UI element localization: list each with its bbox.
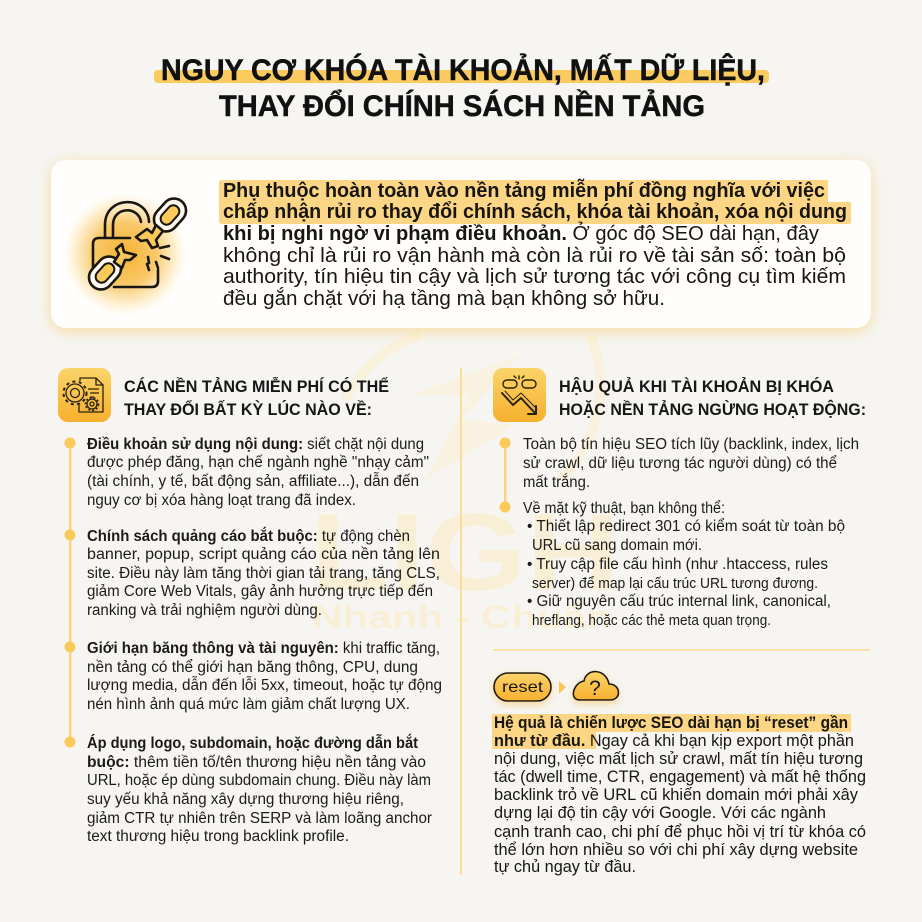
right timeline <box>500 438 510 512</box>
item: terms of use: nguy cơ bị xóa hàng loạt trang đã index. <box>87 492 356 509</box>
lower chain link <box>84 252 126 294</box>
item: logo and subdomain: giảm CTR tự nhiên trên SERP và làm loãng anchor <box>87 810 432 827</box>
reset paragraph: dựng lại độ tin cậy với Google. Với các ngành <box>494 803 826 822</box>
item: logo and subdomain: text thương hiệu trong backlink profile. <box>87 828 349 845</box>
card text <box>223 178 847 310</box>
card text: Phụ thuộc hoàn toàn vào nền tảng miễn phí đồng nghĩa với việc <box>223 178 825 202</box>
item: technical limits: Về mặt kỹ thuật, bạn không thể: <box>523 500 725 517</box>
timeline <box>64 438 76 748</box>
title <box>154 53 769 123</box>
item: logo and subdomain: Áp dụng logo, subdomain, hoặc đường dẫn bắt <box>87 734 418 752</box>
reset paragraph: backlink trỏ về URL cũ khiến domain mới phải xây <box>494 785 858 804</box>
item: bandwidth limits: Giới hạn băng thông và tài nguyên: khi traffic tăng, <box>87 640 440 657</box>
item: bandwidth limits: lượng media, dẫn đến lỗi 5xx, timeout, hoặc tự động <box>87 677 442 694</box>
card text: authority, tín hiệu tin cậy và lịch sử tương tác với công cụ tìm kiếm <box>223 265 846 288</box>
reset paragraph: như từ đầu. Ngay cả khi bạn kịp export một phần <box>494 731 854 750</box>
reset paragraph: cạnh tranh cao, chi phí để phục hồi vị trí từ khóa có <box>494 822 866 841</box>
item: lost signals: Toàn bộ tín hiệu SEO tích lũy (backlink, index, lịch <box>523 436 859 453</box>
item: bandwidth limits: nén hình ảnh quá mức làm giảm chất lượng UX. <box>87 696 410 713</box>
item: technical limits <box>523 500 845 629</box>
question cloud: ? <box>589 677 601 700</box>
item: lost signals: sử crawl, dữ liệu tương tác người dùng) có thể <box>523 455 837 472</box>
item: logo and subdomain: suy yếu khả năng xây dựng thương hiệu riêng, <box>87 791 404 808</box>
card highlight <box>219 180 851 224</box>
right heading: HẬU QUẢ KHI TÀI KHOẢN BỊ KHÓA <box>559 377 834 396</box>
icon: gears and document <box>58 368 111 422</box>
item: technical limits: URL cũ sang domain mới. <box>532 537 702 554</box>
item: lost signals <box>523 436 859 491</box>
right heading: HOẶC NỀN TẢNG NGỪNG HOẠT ĐỘNG: <box>559 400 866 419</box>
title highlight bar <box>154 70 769 83</box>
item: logo and subdomain: buộc: thêm tiền tố/tên thương hiệu nền tảng vào <box>87 754 426 771</box>
title line 1: NGUY CƠ KHÓA TÀI KHOẢN, MẤT DỮ LIỆU, <box>161 53 765 87</box>
item: technical limits: • Truy cập file cấu hình (như .htaccess, rules <box>527 556 828 573</box>
reset paragraph: tự chủ ngay từ đầu. <box>494 857 636 876</box>
watermark logo: LIGH <box>310 491 620 614</box>
reset pill: reset <box>502 679 544 696</box>
reset paragraph: tác (dwell time, CTR, engagement) và mất hệ thống <box>494 767 866 786</box>
item: bandwidth limits: nền tảng có thể giới hạn băng thông, CPU, dung <box>87 659 418 676</box>
item: mandatory ads: site. Điều này làm tăng thời gian tải trang, tăng CLS, <box>87 565 440 582</box>
item: lost signals: mất trắng. <box>523 474 590 491</box>
panel: left column <box>58 368 442 845</box>
icon: broken chain and falling arrow <box>493 368 546 422</box>
panel: intro card <box>51 160 871 328</box>
icon: broken chain padlock <box>63 192 191 316</box>
item: mandatory ads: giảm Core Web Vitals, gây ảnh hưởng trực tiếp đến <box>87 583 433 600</box>
item: mandatory ads: banner, popup, script quảng cáo của nền tảng lên <box>87 546 440 563</box>
item: terms of use: Điều khoản sử dụng nội dung: siết chặt nội dung <box>87 436 424 453</box>
right heading <box>559 377 866 419</box>
item: mandatory ads: Chính sách quảng cáo bắt buộc: tự động chèn <box>87 527 410 545</box>
item: terms of use <box>87 436 429 509</box>
item: technical limits: • Giữ nguyên cấu trúc internal link, canonical, <box>527 593 831 610</box>
card text: không chỉ là rủi ro vận hành mà còn là rủi ro về tài sản số: toàn bộ <box>223 244 846 267</box>
title line 2: THAY ĐỔI CHÍNH SÁCH NỀN TẢNG <box>219 89 705 123</box>
card text: khi bị nghi ngờ vi phạm điều khoản. Ở góc độ SEO dài hạn, đây <box>223 221 820 245</box>
watermark logo <box>310 335 620 635</box>
arrow <box>559 681 566 694</box>
left heading: CÁC NỀN TẢNG MIỄN PHÍ CÓ THỂ <box>124 377 389 396</box>
reset paragraph: thể lớn hơn nhiều so với chi phí xây dựng website <box>494 840 858 859</box>
watermark logo: Nhanh - Chuẩn <box>312 599 612 635</box>
reset highlight <box>492 714 851 749</box>
item: mandatory ads <box>87 527 440 619</box>
icon: reset to unknown <box>494 672 619 701</box>
reset paragraph: Hệ quả là chiến lược SEO dài hạn bị “reset” gần <box>494 713 848 732</box>
card text: đều gắn chặt với hạ tầng mà bạn không sở hữu. <box>223 287 665 310</box>
upper chain link <box>149 194 191 236</box>
reset paragraph: nội dung, việc mất lịch sử crawl, mất tín hiệu tương <box>494 749 863 768</box>
item: technical limits: • Thiết lập redirect 301 có kiểm soát từ toàn bộ <box>527 518 845 535</box>
reset paragraph <box>494 713 866 876</box>
item: logo and subdomain: URL, hoặc ép dùng subdomain chung. Điều này làm <box>87 772 431 789</box>
item: bandwidth limits <box>87 640 442 713</box>
item: technical limits: server) để map lại cấu trúc URL tương đương. <box>532 576 818 592</box>
item: terms of use: (tài chính, y tế, bất động sản, affiliate...), dẫn đến <box>87 473 419 490</box>
left heading: THAY ĐỔI BẤT KỲ LÚC NÀO VỀ: <box>124 400 372 419</box>
card text: chấp nhận rủi ro thay đổi chính sách, khóa tài khoản, xóa nội dung <box>223 200 847 223</box>
panel: right column <box>492 368 870 876</box>
item: terms of use: được phép đăng, hạn chế ngành nghề "nhạy cảm" <box>87 454 429 471</box>
item: logo and subdomain <box>87 734 432 845</box>
item: mandatory ads: ranking và trải nghiệm người dùng. <box>87 602 322 619</box>
left heading <box>124 377 389 419</box>
item: technical limits: hreflang, hoặc các thẻ meta quan trọng. <box>532 613 771 629</box>
